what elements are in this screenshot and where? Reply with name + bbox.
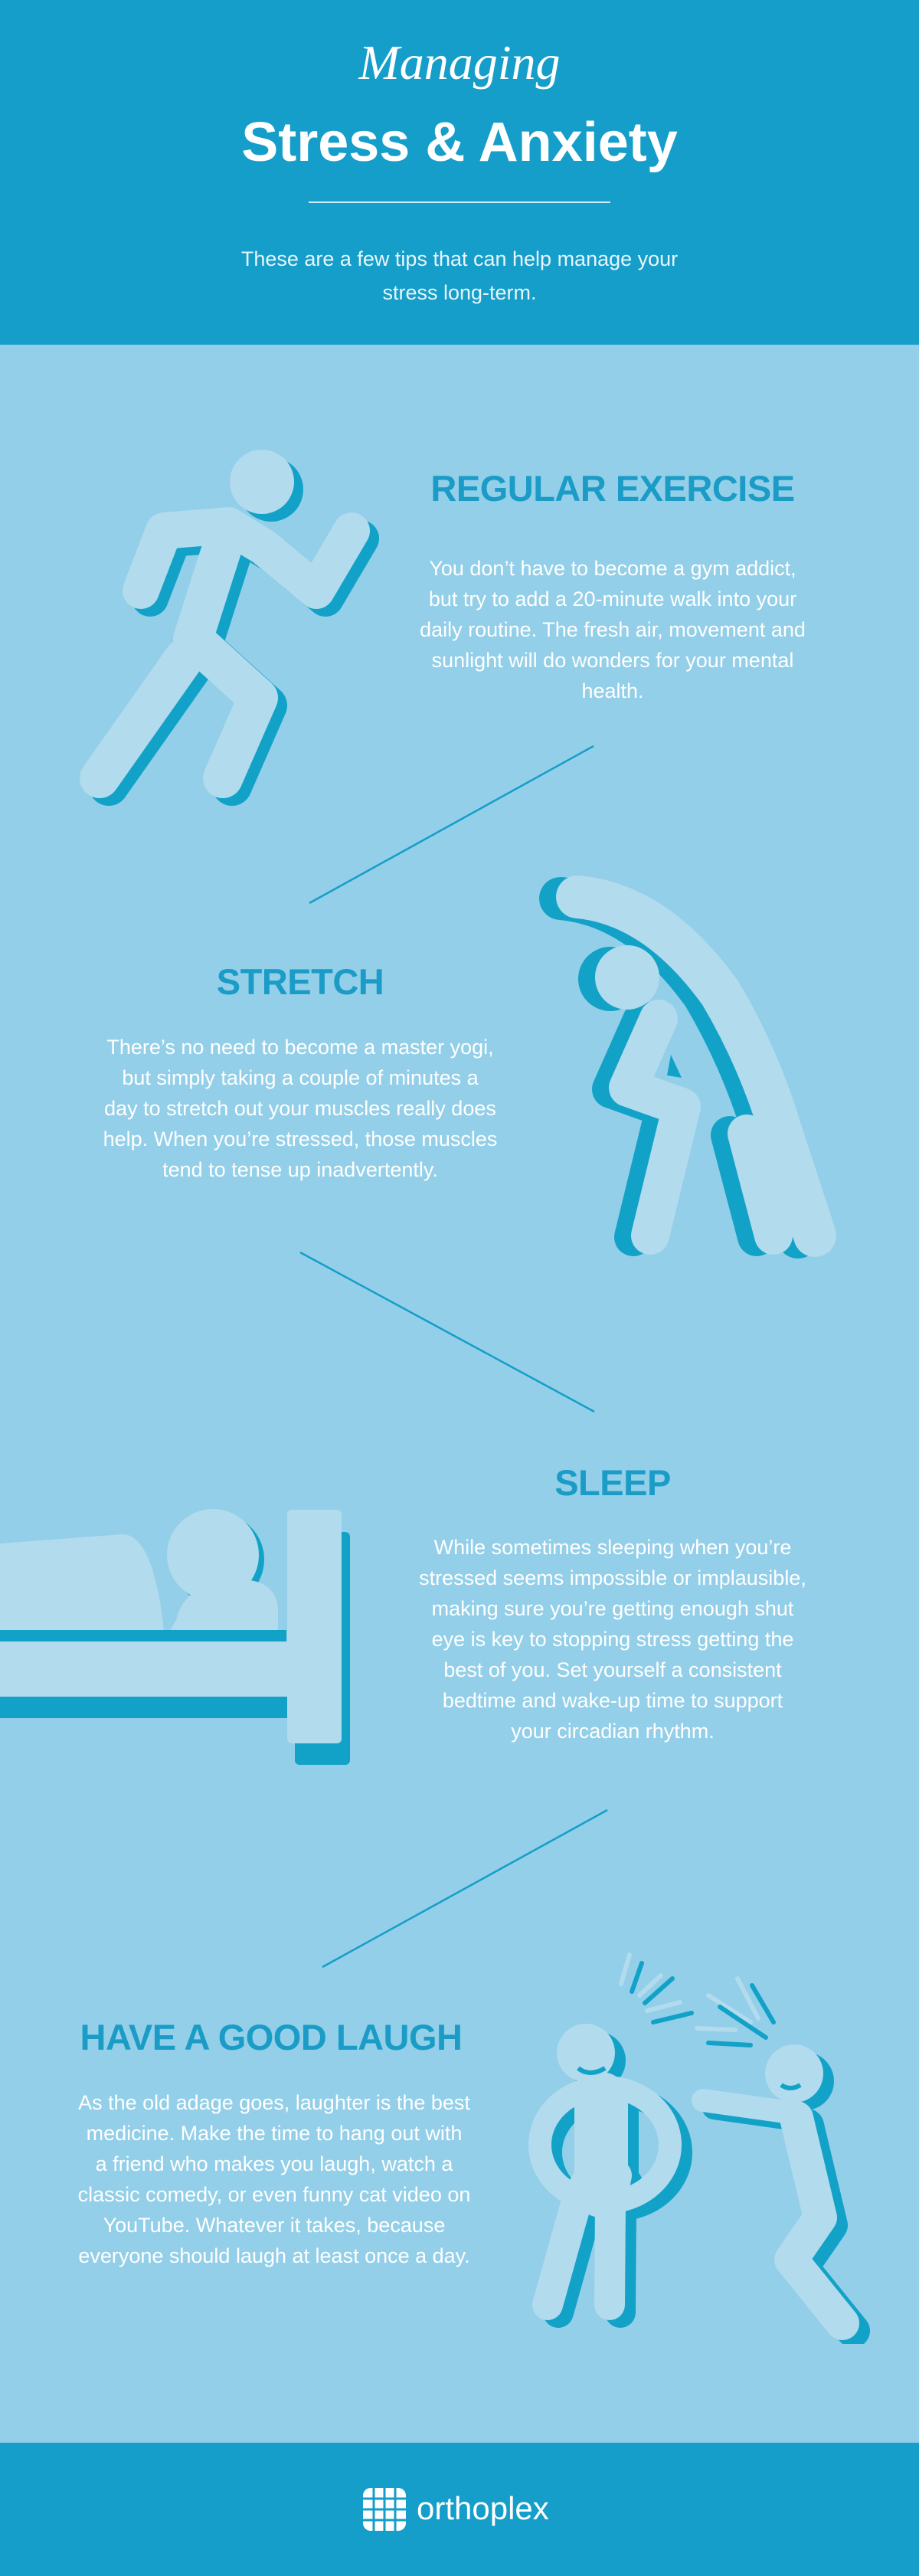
title script: Managing	[358, 35, 561, 90]
heading: sleep: SLEEP	[554, 1462, 671, 1503]
icon: stretch	[539, 876, 836, 1259]
text: regular exercise: daily routine. The fresh air, movement and	[420, 618, 806, 641]
icon: bed	[0, 1509, 350, 1765]
text: sleep: best of you. Set yourself a consistent	[443, 1658, 782, 1681]
text: stretch: help. When you’re stressed, those muscles	[103, 1128, 497, 1151]
title main: Stress & Anxiety	[241, 112, 678, 173]
header	[0, 0, 919, 345]
text: laugh: classic comedy, or even funny cat video on	[78, 2183, 470, 2206]
text: regular exercise: health.	[581, 679, 644, 702]
icon: logo grid	[363, 2488, 406, 2531]
logo	[363, 2488, 549, 2531]
subtitle	[241, 247, 678, 304]
text: sleep: While sometimes sleeping when you’re	[434, 1536, 791, 1559]
heading: stretch: STRETCH	[217, 961, 384, 1002]
logo text: orthoplex	[417, 2490, 549, 2526]
text: laugh	[78, 2091, 470, 2267]
text: laugh: everyone should laugh at least once a day.	[78, 2244, 470, 2267]
icon: laughing people	[528, 1952, 870, 2344]
text: sleep: eye is key to stopping stress getting the	[432, 1628, 793, 1651]
subtitle: stress long-term.	[382, 281, 537, 304]
text: laugh: medicine. Make the time to hang out with	[87, 2122, 462, 2145]
text: sleep: bedtime and wake-up time to support	[443, 1689, 783, 1712]
text: laugh: As the old adage goes, laughter is the best	[78, 2091, 470, 2114]
icon: runner	[80, 450, 379, 806]
text: stretch: tend to tense up inadvertently.	[162, 1158, 438, 1181]
text: sleep: making sure you’re getting enough shut	[432, 1597, 793, 1620]
text: stretch: There’s no need to become a master yogi,	[106, 1036, 494, 1059]
text: sleep	[419, 1536, 806, 1743]
text: stretch	[103, 1036, 497, 1181]
footer	[0, 2443, 919, 2576]
heading: have a good laugh: HAVE A GOOD LAUGH	[80, 2017, 462, 2057]
heading: regular exercise: REGULAR EXERCISE	[430, 468, 795, 509]
text: sleep: your circadian rhythm.	[511, 1720, 715, 1743]
text: laugh: a friend who makes you laugh, watch a	[96, 2152, 453, 2175]
text: regular exercise: You don’t have to become a gym addict,	[429, 557, 796, 580]
text: stretch: but simply taking a couple of minutes a	[122, 1066, 479, 1089]
text: regular exercise: but try to add a 20-minute walk into your	[429, 588, 796, 610]
text: regular exercise: sunlight will do wonders for your mental	[432, 649, 793, 672]
text: stretch: day to stretch out your muscles really does	[104, 1097, 496, 1120]
subtitle: These are a few tips that can help manage your	[241, 247, 678, 270]
text: laugh: YouTube. Whatever it takes, because	[103, 2214, 445, 2237]
text: regular exercise	[420, 557, 806, 702]
text: sleep: stressed seems impossible or implausible,	[419, 1566, 806, 1589]
